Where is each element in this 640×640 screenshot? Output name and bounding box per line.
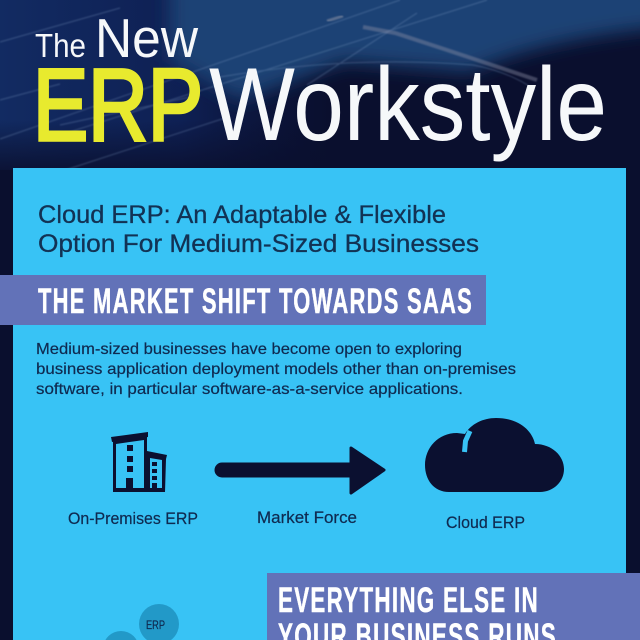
section banner: everything else xyxy=(267,573,640,640)
panel: main content xyxy=(0,168,626,640)
body text: software, in particular software-as-a-service applications. xyxy=(36,381,463,398)
labels: Cloud ERP xyxy=(446,514,525,532)
labels: On-Premises ERP xyxy=(68,510,198,528)
arrow: market force xyxy=(222,448,384,493)
title line: The New: The xyxy=(35,27,86,64)
title line: The New xyxy=(35,7,198,69)
bubbles: ERP: ERP xyxy=(146,618,165,632)
heading xyxy=(38,201,479,258)
labels xyxy=(68,509,525,532)
heading: Option For Medium-Sized Businesses xyxy=(38,230,479,258)
bubbles: ERP xyxy=(103,604,179,640)
title word: ERP: ERP xyxy=(33,48,203,162)
labels: Market Force xyxy=(257,509,357,527)
icon: office building xyxy=(111,432,167,492)
body text: Medium-sized businesses have become open to exploring xyxy=(36,341,462,358)
icon: cloud xyxy=(425,418,564,492)
body text: business application deployment models other than on-premises xyxy=(36,361,516,378)
section banner: market shift xyxy=(0,275,486,325)
heading: Cloud ERP: An Adaptable & Flexible xyxy=(38,201,446,229)
title xyxy=(33,7,607,163)
body text xyxy=(36,341,516,398)
title line: The New: New xyxy=(95,7,198,69)
